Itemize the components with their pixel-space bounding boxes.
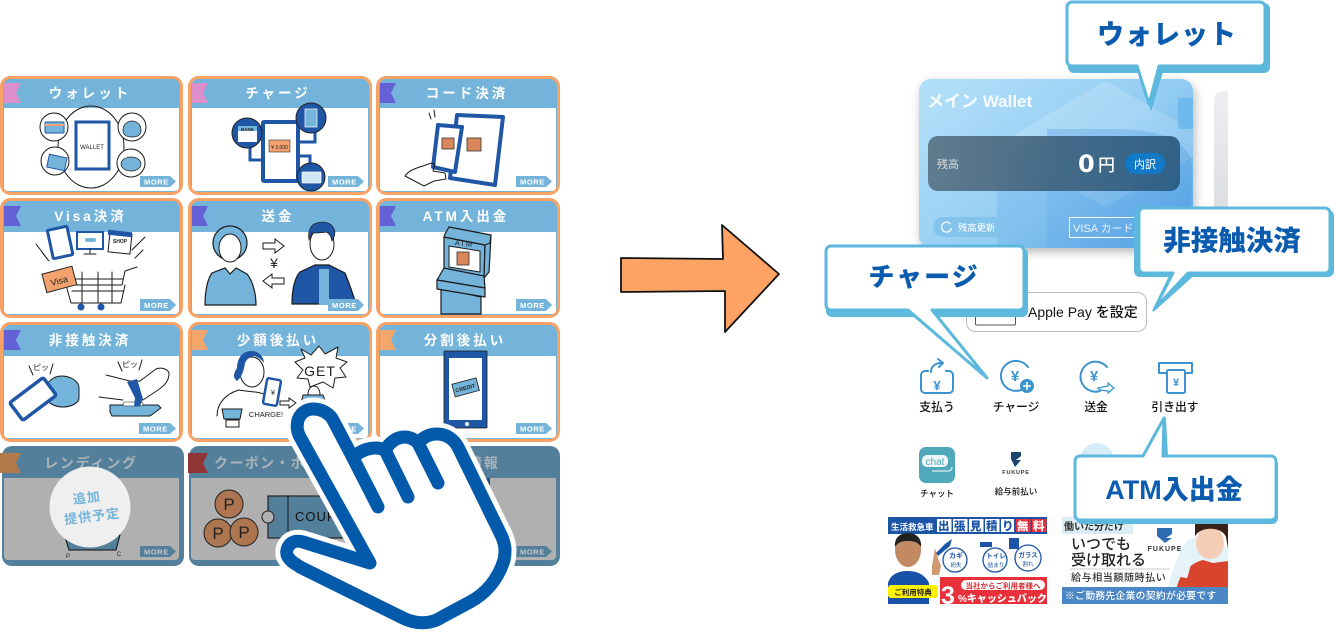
card: コード決済 bbox=[378, 78, 558, 194]
card: クーポン・ポイント (disabled): クーポン・ポイント bbox=[214, 455, 352, 471]
banner: 生活救急車: カギ bbox=[949, 552, 963, 560]
card: Visa決済: SHOP bbox=[113, 239, 128, 245]
card: チャージ: BANK bbox=[241, 127, 255, 132]
main wallet card: 内訳 bbox=[1134, 157, 1156, 171]
card: チャージ bbox=[190, 78, 370, 194]
card: Visa決済: Visa bbox=[50, 274, 69, 288]
callout: ウォレット: ウォレット bbox=[1097, 20, 1237, 50]
card: 非接触決済: 非接触決済 bbox=[49, 332, 131, 348]
panel: app screen bbox=[888, 79, 1228, 610]
main wallet card: VISA カード bbox=[1073, 222, 1134, 235]
card: チャージ: MORE bbox=[332, 178, 357, 186]
card: レンディング (disabled) bbox=[0, 446, 184, 566]
card: Visa決済: MORE bbox=[144, 301, 169, 310]
banner: FUKUPE: 給与相当額随時払い bbox=[1071, 571, 1166, 584]
card: クーポン・ポイント (disabled): P bbox=[238, 523, 250, 542]
icon: pointing hand bbox=[287, 409, 505, 623]
card: 分割後払い bbox=[378, 324, 558, 440]
panel: feature card grid bbox=[0, 78, 560, 566]
main wallet card: 0 bbox=[1078, 150, 1095, 178]
main wallet card bbox=[919, 79, 1193, 248]
card: クーポン・ポイント (disabled): P bbox=[223, 495, 235, 514]
banner: 生活救急車: 紛失 bbox=[950, 561, 962, 569]
card: クーポン・ポイント (disabled): P bbox=[212, 524, 224, 543]
banner: 生活救急車: %キャッシュバック bbox=[958, 592, 1047, 605]
banner: 生活救急車: 生活救急車 bbox=[891, 522, 934, 532]
card: 少額後払い bbox=[190, 324, 370, 440]
icon: 支払う: ¥ bbox=[933, 378, 941, 393]
card: お得情報 (disabled): MORE bbox=[520, 548, 545, 556]
banner: 生活救急車: 無料 bbox=[1017, 519, 1049, 533]
callout: 非接触決済 bbox=[1135, 208, 1333, 311]
card: 送金: 送金 bbox=[262, 208, 294, 224]
card: クーポン・ポイント (disabled) bbox=[188, 446, 372, 566]
card: 送金 bbox=[190, 200, 370, 316]
banner: 生活救急車 bbox=[888, 517, 1049, 610]
callout: ATM入出金 bbox=[1075, 418, 1277, 523]
card: コード決済: MORE bbox=[520, 178, 545, 186]
card: 分割後払い: 分割後払い bbox=[424, 332, 506, 348]
icon: 支払う bbox=[919, 359, 955, 414]
card: クーポン・ポイント (disabled): COUPON bbox=[295, 509, 358, 524]
card: 非接触決済: ピッ bbox=[122, 360, 138, 369]
icon: 送金: ¥ bbox=[1090, 368, 1099, 385]
banner: 生活救急車: 3 bbox=[941, 582, 955, 610]
card: 少額後払い: MORE bbox=[332, 424, 357, 434]
main wallet card: メイン Wallet bbox=[927, 92, 1032, 111]
icon: chat: チャット bbox=[920, 488, 954, 498]
banner: FUKUPE: FUKUPE bbox=[1148, 546, 1182, 553]
Apple Pay button bbox=[966, 292, 1146, 332]
card: コード決済: コード決済 bbox=[426, 86, 508, 101]
icon: chat: chat bbox=[926, 457, 945, 468]
icon: FUKUPE: FUKUPE bbox=[1002, 470, 1030, 476]
Apple Pay button: Apple Pay を設定 bbox=[1028, 304, 1138, 320]
badge: 追加提供予定 bbox=[50, 466, 130, 548]
callout: チャージ bbox=[826, 246, 1027, 378]
card: チャージ: ¥ 3,000 bbox=[271, 145, 288, 151]
card: ウォレット: WALLET bbox=[80, 145, 104, 151]
card: Visa決済: Visa決済 bbox=[54, 209, 127, 224]
icon: chat bbox=[919, 447, 955, 498]
icon: 支払う: 支払う bbox=[919, 400, 955, 414]
card: 少額後払い: ¥ bbox=[271, 390, 275, 397]
icon: FUKUPE: 給与前払い bbox=[995, 486, 1037, 496]
icon: チャージ: チャージ bbox=[993, 400, 1040, 414]
card: 送金: MORE bbox=[332, 301, 357, 310]
icon: チャージ: ¥ bbox=[1011, 368, 1020, 385]
callout: チャージ: チャージ bbox=[868, 262, 980, 292]
banner: 生活救急車: 詰まり bbox=[988, 561, 1004, 569]
card: ウォレット bbox=[2, 78, 182, 194]
card: 送金: ¥ bbox=[269, 255, 278, 271]
card: ATM入出金: MORE bbox=[520, 301, 545, 310]
banner: 生活救急車: ガラス bbox=[1018, 550, 1038, 559]
banner: 生活救急車: 割れ bbox=[1022, 560, 1034, 568]
icon: チャージ bbox=[993, 361, 1040, 414]
badge: 追加提供予定: 提供予定 bbox=[63, 505, 121, 527]
banner: FUKUPE bbox=[1062, 517, 1228, 604]
card: レンディング (disabled): C bbox=[117, 552, 122, 558]
callout: ウォレット bbox=[1067, 2, 1269, 108]
card: ATM入出金: ATM入出金 bbox=[423, 208, 509, 224]
card: 分割後払い: MORE bbox=[520, 424, 545, 434]
card: 少額後払い: CHARGE! bbox=[249, 410, 283, 419]
card: 分割後払い: CREDIT bbox=[455, 383, 477, 394]
card: 少額後払い: 少額後払い bbox=[237, 332, 319, 348]
callout: 非接触決済: 非接触決済 bbox=[1163, 225, 1301, 256]
decorative tile behind callout bbox=[1080, 443, 1114, 477]
icon: 引き出す: ¥ bbox=[1173, 377, 1180, 389]
icon: 引き出す bbox=[1151, 363, 1199, 414]
banner: FUKUPE: ※ご勤務先企業の契約が必要です bbox=[1065, 589, 1216, 602]
main wallet card: 円 bbox=[1098, 156, 1115, 175]
card: ATM入出金: ATM bbox=[454, 238, 474, 249]
card: 少額後払い: GET bbox=[304, 363, 336, 379]
card: 非接触決済: ピッ bbox=[33, 363, 49, 372]
card: レンディング (disabled): P bbox=[66, 554, 70, 560]
main wallet card: 残高更新 bbox=[958, 222, 995, 233]
card: Visa決済 bbox=[2, 200, 182, 316]
badge: 追加提供予定: 追加 bbox=[72, 489, 102, 507]
banner: 生活救急車: 当社からご利用者様へ bbox=[966, 580, 1041, 590]
card: ウォレット: ウォレット bbox=[49, 86, 131, 101]
card: レンディング (disabled): レンディング bbox=[44, 455, 138, 471]
card: 非接触決済: MORE bbox=[143, 424, 168, 434]
arrow: orange right arrow bbox=[621, 225, 779, 332]
card: お得情報 (disabled): お得情報 bbox=[436, 455, 500, 471]
card: ATM入出金 bbox=[378, 200, 558, 316]
main wallet card: 残高 bbox=[937, 157, 959, 171]
icon: FUKUPE bbox=[995, 452, 1037, 496]
callout: ATM入出金: ATM入出金 bbox=[1105, 475, 1243, 505]
banner: FUKUPE: 働いた分だけ bbox=[1064, 520, 1124, 533]
card: チャージ: チャージ bbox=[245, 86, 311, 101]
second wallet card sliver bbox=[1214, 91, 1228, 246]
card: お得情報 (disabled) bbox=[376, 446, 560, 566]
card: 非接触決済 bbox=[2, 324, 182, 440]
banner: FUKUPE: いつでも bbox=[1071, 536, 1131, 553]
banner: 生活救急車: ご利用特典 bbox=[894, 587, 932, 597]
card: レンディング (disabled): MORE bbox=[144, 548, 169, 556]
icon: 送金: 送金 bbox=[1084, 400, 1108, 414]
icon: 送金 bbox=[1081, 362, 1114, 414]
icon: 引き出す: 引き出す bbox=[1151, 400, 1199, 414]
card: ウォレット: MORE bbox=[144, 178, 169, 186]
banner: 生活救急車: 出張見積り bbox=[938, 519, 1018, 533]
banner: 生活救急車: トイレ bbox=[986, 552, 1006, 560]
banner: FUKUPE: 受け取れる bbox=[1071, 551, 1146, 569]
